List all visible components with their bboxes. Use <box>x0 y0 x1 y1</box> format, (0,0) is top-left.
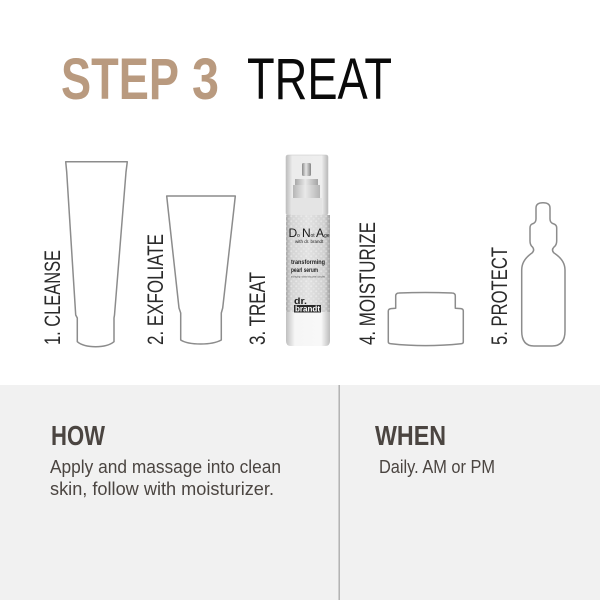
how text <box>50 457 281 499</box>
serum product name: transforming <box>291 259 325 266</box>
icon: moisturizer jar <box>388 292 463 346</box>
serum dr. brandt logo: brandt <box>295 304 320 314</box>
icon: exfoliant tube <box>167 196 235 344</box>
title: STEP <box>61 47 179 112</box>
serum brand mark: ge <box>324 233 330 239</box>
how text: skin, follow with moisturizer. <box>50 479 274 499</box>
serum base <box>286 312 330 346</box>
how text: Apply and massage into clean <box>50 457 281 477</box>
label: 3. treat: 3. TREAT <box>245 272 270 345</box>
icon: protect dropper bottle <box>522 203 565 346</box>
serum body <box>286 215 330 313</box>
product: transforming pearl serum bottle <box>286 155 330 346</box>
title: TREAT <box>247 47 392 112</box>
serum dr. brandt logo <box>294 296 321 314</box>
serum cap <box>286 155 328 215</box>
label: 5. protect: 5. PROTECT <box>487 247 512 345</box>
serum product name: anti-aging moisturizing pearl complex <box>291 274 325 278</box>
serum brand mark: with dr. brandt <box>295 239 324 244</box>
title: 3 <box>192 47 219 112</box>
serum product name: pearl serum <box>291 267 318 274</box>
how heading: HOW <box>51 420 105 451</box>
title <box>61 47 392 112</box>
serum dr. brandt logo: dr. <box>294 296 307 306</box>
label: 1. cleanse: 1. CLEANSE <box>40 250 65 345</box>
serum brand mark: o <box>297 233 300 239</box>
when heading: WHEN <box>375 420 446 451</box>
label: 4. moisturize: 4. MOISTURIZE <box>355 222 380 345</box>
panel: how and when <box>0 385 600 600</box>
serum brand mark <box>288 226 330 244</box>
when text: Daily. AM or PM <box>379 457 495 477</box>
serum brand mark: D <box>288 226 298 240</box>
icon: cleanser tube <box>66 162 127 347</box>
serum pump <box>291 163 322 215</box>
serum product name <box>291 259 325 278</box>
serum brand mark: N <box>302 226 311 240</box>
label: 2. exfoliate: 2. EXFOLIATE <box>143 234 168 345</box>
serum brand mark: ot <box>310 233 315 239</box>
serum brand mark: A <box>316 226 324 240</box>
